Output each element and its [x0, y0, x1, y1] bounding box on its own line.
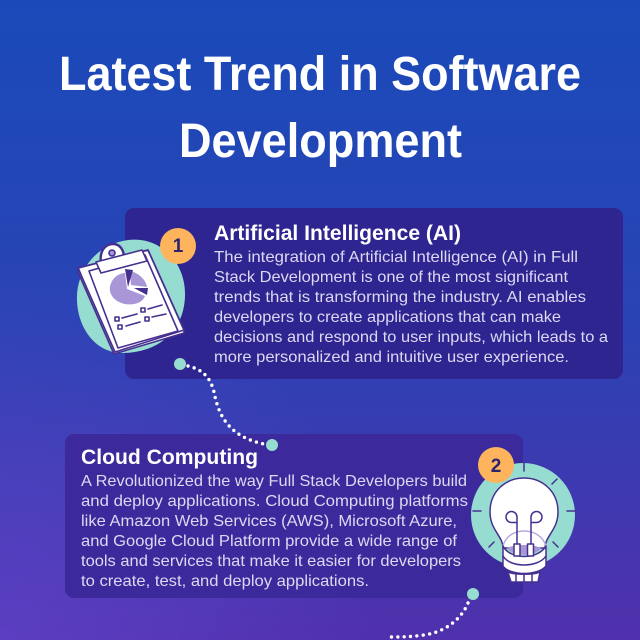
- text block: artificial intelligence description: The integration of Artificial Intelligence (AI) in Full: [214, 249, 578, 266]
- panel: cloud computing: [65, 434, 523, 598]
- text block: artificial intelligence description: trends that is transforming the industry. AI enables: [214, 289, 586, 306]
- panel: artificial intelligence: [125, 208, 623, 379]
- text block: cloud computing description: [81, 473, 468, 590]
- title: Latest Trend in Software: [59, 48, 581, 101]
- text block: artificial intelligence description: developers to create applications that can make: [214, 309, 561, 326]
- badge: number 1: [160, 228, 196, 264]
- text block: artificial intelligence description: more personalized and intuitive user experience.: [214, 349, 569, 366]
- text block: cloud computing description: tools and services that make it easier for developers: [81, 553, 461, 570]
- badge: number 2: [478, 447, 514, 483]
- icon: light bulb: [471, 463, 575, 582]
- text block: cloud computing description: and deploy applications. Cloud Computing platforms: [81, 493, 468, 510]
- title: [59, 48, 581, 168]
- filament: [506, 512, 542, 546]
- heading: cloud computing: Cloud Computing: [81, 446, 258, 469]
- text block: artificial intelligence description: decisions and respond to user inputs, which leads to a: [214, 329, 608, 346]
- list rows: [115, 305, 166, 329]
- connector: dotted line from card 1 to card 2: [174, 358, 278, 451]
- text block: cloud computing description: to create, test, and deploy applications.: [81, 573, 369, 590]
- text block: artificial intelligence description: Stack Development is one of the most significant: [214, 269, 569, 286]
- title: Development: [179, 115, 462, 168]
- bulb rays: [473, 463, 575, 547]
- heading: artificial intelligence: Artificial Intelligence (AI): [214, 222, 461, 245]
- text block: cloud computing description: A Revolutionized the way Full Stack Developers build: [81, 473, 467, 490]
- text block: artificial intelligence description: [214, 249, 608, 366]
- pie chart: [110, 269, 148, 304]
- icon: clipboard with pie chart: [77, 240, 185, 354]
- bulb base: [503, 546, 546, 574]
- text block: cloud computing description: like Amazon Web Services (AWS), Microsoft Azure,: [81, 513, 457, 530]
- connector: dotted line leaving card 2: [388, 588, 479, 637]
- badge: number 2: 2: [491, 456, 501, 477]
- badge: number 1: 1: [173, 236, 184, 257]
- text block: cloud computing description: and Google Cloud Platform provide a wide range of: [81, 533, 458, 550]
